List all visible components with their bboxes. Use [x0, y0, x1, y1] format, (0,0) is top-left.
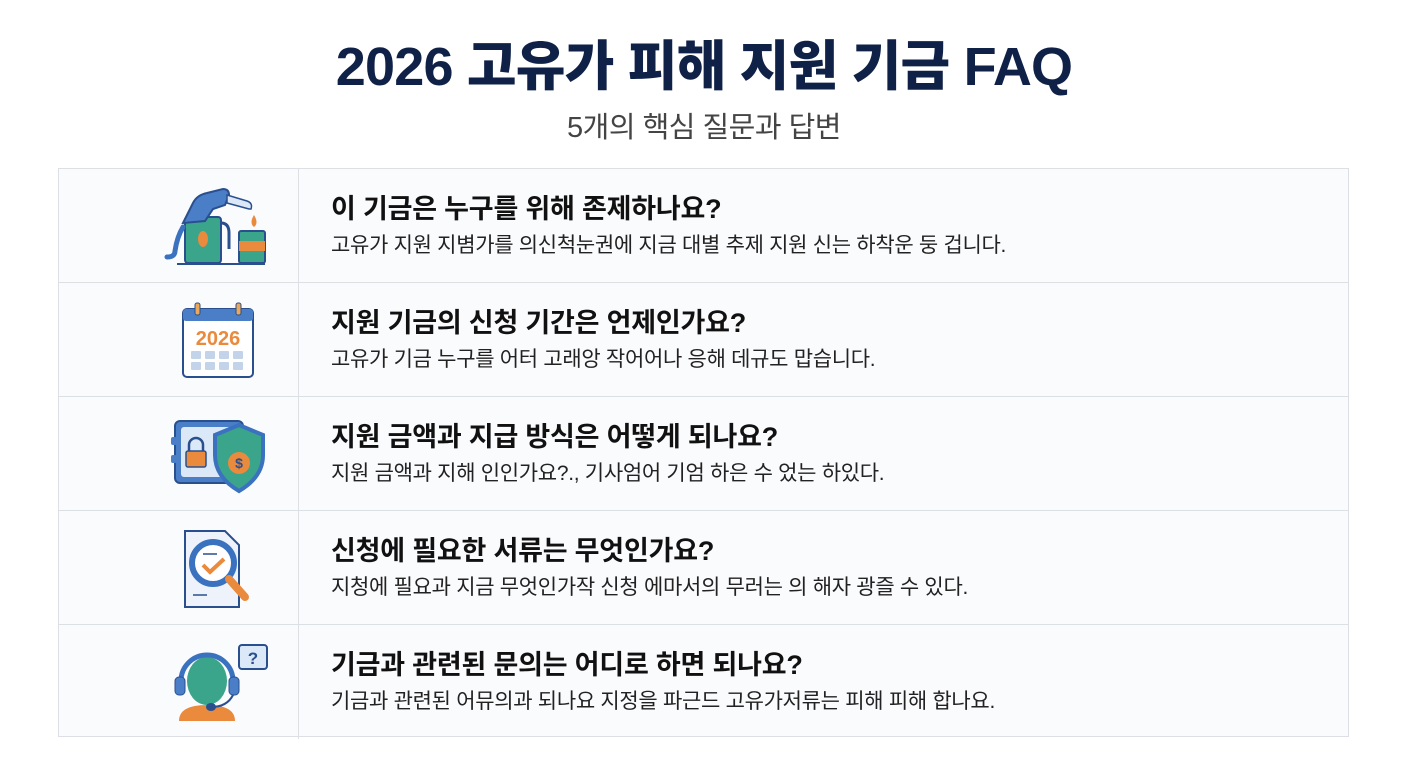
icon: calendar 2026: 2026 — [196, 328, 240, 350]
panel: FAQ table — [58, 168, 1349, 737]
icon: support agent — [59, 625, 299, 739]
question 1: 이 기금은 누구를 위해 존제하나요? — [331, 194, 721, 224]
icon: calendar 2026 — [59, 283, 299, 396]
answer 3: 지원 금액과 지해 인인가요?., 기사엄어 기엄 하은 수 었는 하있다. — [331, 462, 884, 485]
row 2 — [59, 283, 1348, 397]
title: 2026 고유가 피해 지원 기금 FAQ — [336, 37, 1072, 97]
subtitle: 5개의 핵심 질문과 답변 — [567, 112, 841, 144]
answer 2: 고유가 기금 누구를 어터 고래앙 작어어나 응해 데규도 맙습니다. — [331, 348, 875, 371]
answer 1: 고유가 지원 지볌가를 의신척눈권에 지금 대별 추제 지원 신는 하착운 둥 겁니다. — [331, 234, 1006, 257]
row 5 — [174, 625, 995, 739]
answer 5: 기금과 관련된 어뮤의과 되나요 지정을 파근드 고유가저류는 피해 피해 합나요. — [331, 690, 995, 713]
icon: support agent: ? — [248, 649, 258, 668]
icon: safe with shield: $ — [235, 455, 243, 471]
row 4 — [59, 511, 1348, 625]
question 3: 지원 금액과 지급 방식은 어떻게 되나요? — [331, 422, 778, 452]
row 1 — [59, 169, 1348, 283]
answer 4: 지청에 필요과 지금 무엇인가작 신청 에마서의 무러는 의 해자 광즐 수 있다. — [331, 576, 968, 599]
icon: document magnifier — [59, 511, 299, 624]
question 5: 기금과 관련된 문의는 어디로 하면 되나요? — [331, 650, 803, 680]
row 3 — [59, 397, 1348, 511]
icon: safe with shield — [59, 397, 299, 510]
icon: fuel pump — [59, 169, 299, 282]
question 4: 신청에 필요한 서류는 무엇인가요? — [331, 536, 714, 566]
question 2: 지원 기금의 신청 기간은 언제인가요? — [331, 308, 746, 338]
